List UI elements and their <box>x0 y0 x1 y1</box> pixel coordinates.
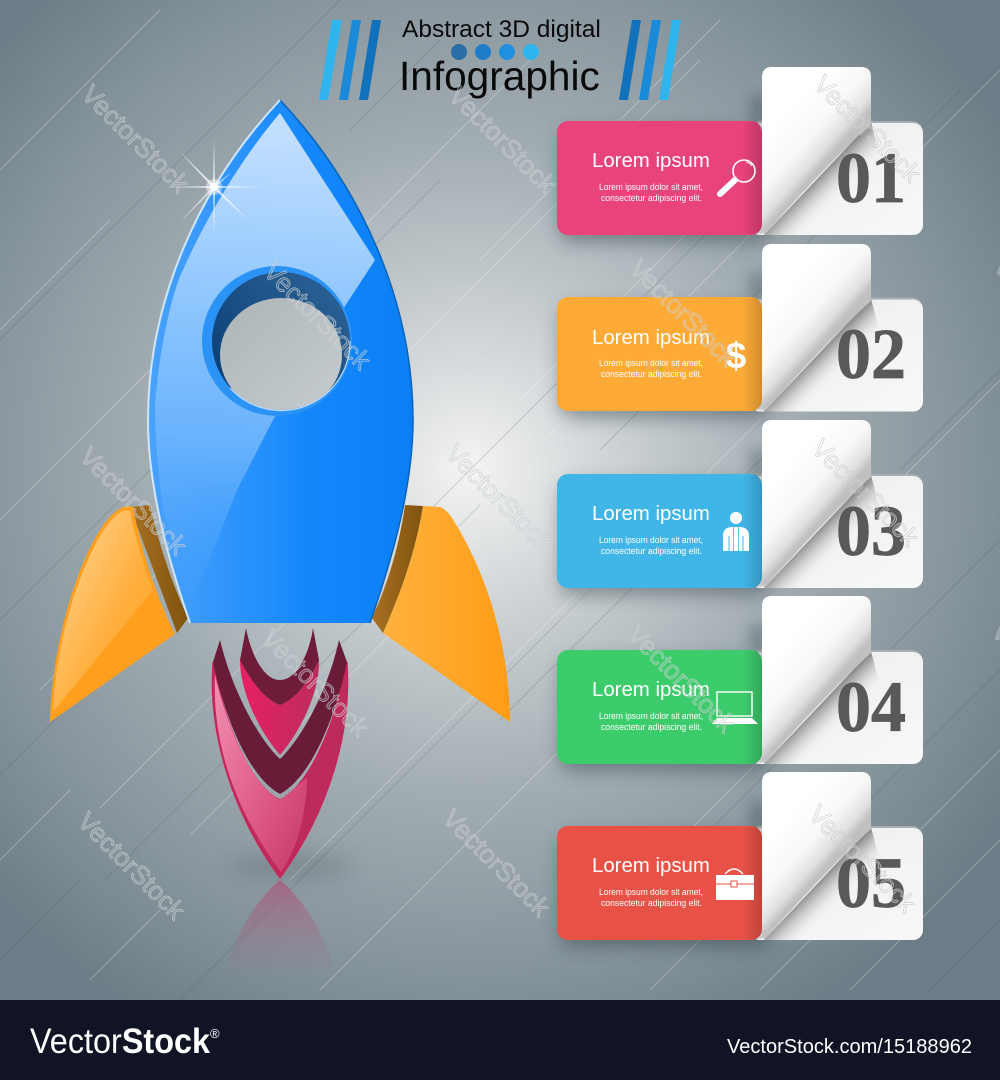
card 4 <box>557 596 923 771</box>
card 3 <box>557 420 923 595</box>
card 1 heading: Lorem ipsum <box>592 150 710 172</box>
card 4 number: 04 <box>836 667 906 747</box>
watermarks: VectorStock <box>806 433 926 553</box>
card 1 <box>557 67 923 242</box>
header: left stripes <box>319 20 381 100</box>
card 4 description: Lorem ipsum dolor sit amet, <box>599 711 703 721</box>
card 1 curled page <box>762 67 871 234</box>
card 3 number panel <box>750 474 923 588</box>
footer registered mark: ® <box>210 1026 220 1041</box>
rocket body <box>148 100 413 623</box>
watermarks: VectorStock <box>803 799 923 919</box>
watermarks: VectorStock <box>624 253 744 373</box>
rocket <box>50 100 510 975</box>
sparkle <box>163 137 263 237</box>
card 1 number: 01 <box>836 138 906 218</box>
card 3 curled page <box>762 420 871 587</box>
card 3 number: 03 <box>836 491 906 571</box>
subtitle: Abstract 3D digital <box>402 16 601 43</box>
flame <box>212 628 352 975</box>
title: Infographic <box>399 53 600 99</box>
watermarks: VectorStock <box>72 806 192 926</box>
card 3 heading: Lorem ipsum <box>592 503 710 525</box>
card 1 description: consectetur adipiscing elit. <box>601 193 702 203</box>
icon: laptop <box>712 692 758 724</box>
card 5 <box>557 772 923 947</box>
card 2 curled page <box>762 244 871 411</box>
watermarks: VectorStock <box>256 623 376 743</box>
card 2 heading: Lorem ipsum <box>592 327 710 349</box>
left fin <box>50 505 188 722</box>
watermarks: VectorStock <box>74 441 194 561</box>
icon: person <box>723 512 749 551</box>
card 2 <box>557 244 923 418</box>
icon: dollar: $ <box>726 335 747 376</box>
rocket window <box>202 266 352 416</box>
card 4 curled page <box>762 596 871 763</box>
icon: magnifier <box>720 160 755 194</box>
watermarks: VectorStock <box>622 619 742 739</box>
watermarks: VectorStock <box>808 69 928 189</box>
card 3 description: Lorem ipsum dolor sit amet, <box>599 535 703 545</box>
card 1 description: Lorem ipsum dolor sit amet, <box>599 182 703 192</box>
card 2 label <box>557 297 762 411</box>
header: right stripes <box>619 20 681 100</box>
footer bar <box>0 1000 1000 1080</box>
card 5 description: Lorem ipsum dolor sit amet, <box>599 887 703 897</box>
icon: briefcase <box>716 869 754 900</box>
card 4 description: consectetur adipiscing elit. <box>601 722 702 732</box>
footer logo: VectorStock <box>30 1022 210 1061</box>
watermarks: VectorStock <box>440 438 560 558</box>
watermarks: VectorStock <box>258 256 378 376</box>
header dots <box>451 44 539 60</box>
card 5 heading: Lorem ipsum <box>592 855 710 877</box>
watermarks: VectorStock <box>437 803 557 923</box>
watermarks: VectorStock <box>443 80 563 200</box>
card 2 number: 02 <box>836 314 906 394</box>
card 5 label <box>557 826 762 940</box>
card 1 label <box>557 121 762 235</box>
card 3 description: consectetur adipiscing elit. <box>601 546 702 556</box>
card 5 number panel <box>750 826 923 940</box>
card 2 number panel <box>750 298 923 412</box>
watermarks <box>72 69 1000 926</box>
card 5 curled page <box>762 772 871 939</box>
card 4 number panel <box>750 650 923 764</box>
card 2 description: Lorem ipsum dolor sit amet, <box>599 358 703 368</box>
card 5 number: 05 <box>836 843 906 923</box>
footer url: VectorStock.com/15188962 <box>727 1036 972 1058</box>
card 5 description: consectetur adipiscing elit. <box>601 898 702 908</box>
card 1 number panel <box>750 121 923 235</box>
card 4 heading: Lorem ipsum <box>592 679 710 701</box>
card 3 label <box>557 474 762 588</box>
card 2 description: consectetur adipiscing elit. <box>601 369 702 379</box>
right fin <box>372 505 510 722</box>
card 4 label <box>557 650 762 764</box>
watermarks: VectorStock <box>76 79 196 199</box>
